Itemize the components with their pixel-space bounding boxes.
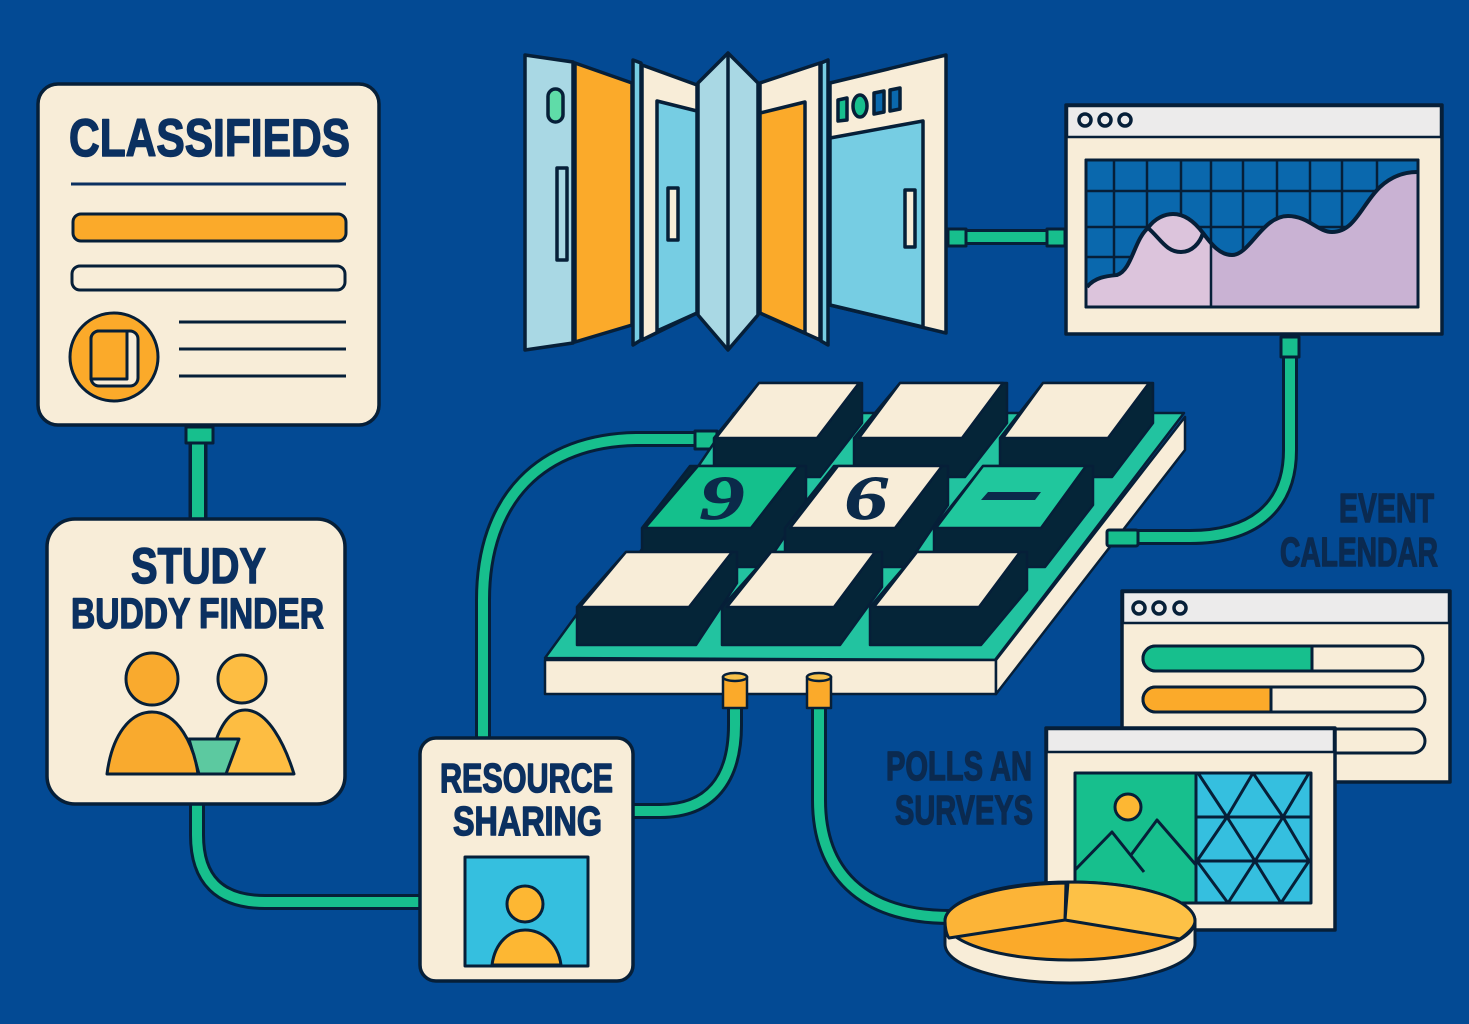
heading: buddy finder: BUDDY FINDER	[71, 590, 324, 638]
board top	[545, 413, 1184, 660]
window: poll bars	[1122, 591, 1450, 782]
window dots	[1079, 114, 1131, 126]
minus sign	[981, 492, 1041, 500]
digit 6: 6	[844, 465, 888, 533]
icon: profile picture	[465, 857, 588, 966]
connector: keypad port two to poll chart	[819, 705, 950, 917]
connector: booklet to chart window	[947, 229, 1066, 246]
window: image gallery	[1046, 728, 1335, 930]
heading: resource: RESOURCE	[440, 755, 613, 801]
orange port two	[807, 673, 831, 708]
illustration: folded booklet	[525, 53, 946, 350]
heading: study: STUDY	[131, 538, 266, 594]
poll bar empty	[1143, 729, 1425, 753]
panel: resource sharing	[420, 738, 633, 981]
poll bar orange	[1143, 687, 1425, 712]
keys: bottom row	[577, 552, 1027, 645]
window: area chart	[1066, 105, 1442, 334]
icon: book badge	[70, 313, 158, 401]
connector: resource sharing to keypad	[483, 431, 717, 740]
connector head: keypad socket	[1107, 530, 1138, 546]
connector: chart window to keypad tube	[1130, 337, 1299, 537]
panel: study buddy finder	[47, 519, 345, 804]
connector: study buddy finder to resource sharing	[197, 802, 422, 902]
board front	[545, 660, 996, 694]
label: polls and surveys: SURVEYS	[895, 787, 1033, 833]
landscape image	[1075, 773, 1196, 903]
pie chart	[945, 882, 1195, 983]
digit 9: 9	[700, 464, 744, 533]
label: polls and surveys: POLLS AN	[886, 743, 1032, 789]
connector: classifieds to study buddy finder	[186, 427, 213, 522]
keys: middle row	[642, 464, 1093, 567]
chart	[1086, 160, 1418, 307]
board side	[996, 417, 1185, 694]
panel: classifieds	[38, 84, 379, 425]
icon: two people with cup	[107, 653, 294, 774]
empty bar	[72, 266, 345, 290]
orange bar	[73, 214, 346, 241]
window dots	[1133, 602, 1186, 614]
keypad board	[545, 383, 1185, 708]
text lines	[179, 322, 346, 376]
label: polls and surveys	[886, 743, 1033, 833]
heading: classifieds: CLASSIFIEDS	[69, 109, 350, 168]
poll bar green	[1143, 646, 1423, 671]
triangle pattern	[1196, 773, 1311, 903]
orange port one	[723, 673, 747, 708]
heading: sharing: SHARING	[453, 798, 602, 844]
label: event calendar	[1280, 485, 1438, 575]
keys: top row	[714, 383, 1153, 477]
connector: resource sharing to keypad port one	[632, 705, 735, 811]
